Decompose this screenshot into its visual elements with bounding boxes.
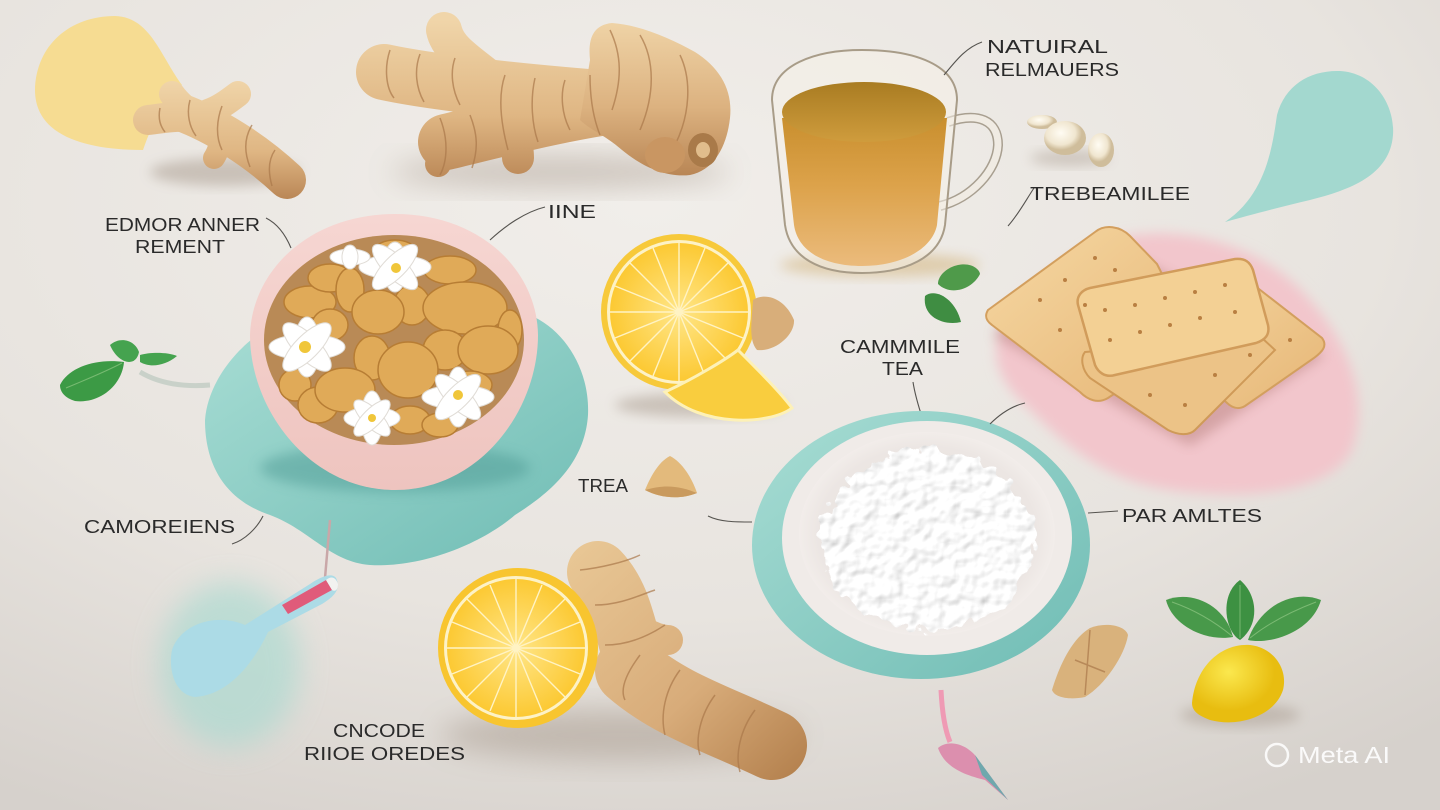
flowers	[269, 238, 494, 445]
label: par amltes: PAR AMLTES	[1122, 506, 1262, 526]
icon: pink pin	[938, 690, 1008, 800]
icon: lemon slice and wedge	[601, 234, 794, 420]
icon: spoon	[160, 520, 338, 747]
label: camomile tea: TEA	[882, 359, 923, 379]
label: natural remedies: NATUIRAL	[987, 37, 1108, 57]
icon: large ginger top	[384, 23, 730, 188]
icon: pills	[1027, 115, 1114, 167]
icon: cereal bowl	[250, 214, 538, 492]
label: cncode rice oredes: RIIOE OREDES	[304, 744, 465, 764]
icon: mint sprig near cup	[925, 264, 980, 323]
label: edmor anner rement	[105, 215, 291, 257]
icon: plate with rice	[752, 411, 1090, 679]
icon: mint sprig left	[60, 340, 210, 401]
icon: cup of tea	[772, 50, 998, 277]
blob: yellow top left	[35, 16, 182, 150]
label: cncode rice oredes	[304, 721, 465, 764]
label: line: IINE	[548, 202, 596, 222]
connector line to plate	[708, 516, 752, 522]
icon: ginger chunk centre	[645, 456, 697, 497]
icon: lemon with mint	[1166, 580, 1321, 727]
icon: ginger chunk bottom right	[1052, 625, 1128, 698]
label: top right tagline	[1008, 184, 1190, 226]
icon: crackers	[986, 227, 1325, 446]
label: camofeiens	[84, 516, 263, 544]
label: camomile tea	[840, 337, 960, 420]
label: edmor anner rement: EDMOR ANNER	[105, 215, 260, 235]
label: edmor anner rement: REMENT	[135, 237, 225, 257]
label: cncode rice oredes: CNCODE	[333, 721, 425, 741]
label: natural remedies	[944, 37, 1119, 80]
label: natural remedies: RELMAUERS	[985, 60, 1119, 80]
label: par amltes	[990, 403, 1262, 526]
label: camofeiens: CAMOREIENS	[84, 517, 235, 537]
label: camomile tea: CAMMMILE	[840, 337, 960, 357]
icon: small ginger top left	[148, 94, 300, 186]
label: trea: TREA	[578, 476, 628, 496]
blob: pink behind crackers	[996, 233, 1359, 494]
watermark: Meta AI: Meta AI	[1298, 742, 1390, 768]
icon: lemon half and ginger bottom	[438, 555, 800, 772]
icon: teal saucer under bowl	[205, 315, 588, 565]
watermark: Meta AI	[1266, 742, 1390, 768]
blob: teal top right	[1225, 71, 1393, 222]
label: line	[490, 202, 596, 240]
label: top right tagline: TREBEAMILEE	[1030, 184, 1190, 204]
